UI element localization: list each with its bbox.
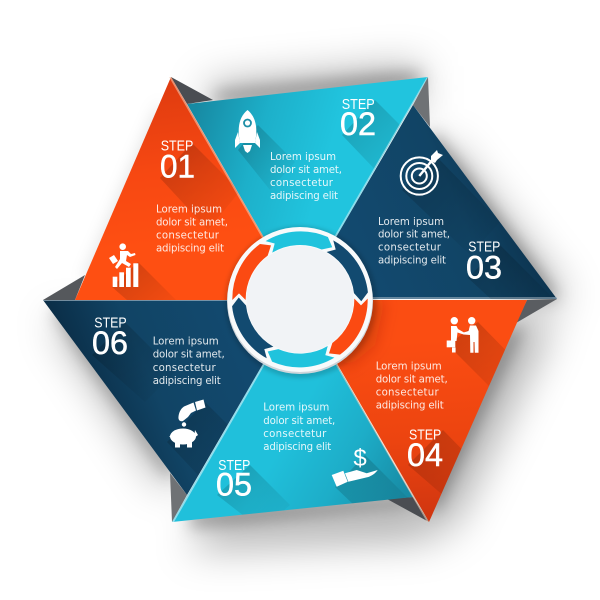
- heading: step 01: STEP: [161, 138, 193, 155]
- text block: step 05: dolor sit amet,: [263, 416, 335, 427]
- heading: step 04: STEP: [409, 427, 441, 444]
- text block: step 06: [153, 337, 225, 387]
- text block: step 06: consectetur: [153, 363, 216, 374]
- arrow: teal top: [266, 213, 333, 275]
- text block: step 02: [270, 152, 342, 202]
- text block: step 04: consectetur: [376, 387, 439, 398]
- icon: hand with dollar: $: [353, 445, 367, 472]
- dark folded corners: [43, 77, 557, 522]
- heading: step 03: STEP: [468, 239, 500, 256]
- text block: step 05: adipiscing elit: [263, 442, 331, 453]
- text block: step 02: adipiscing elit: [270, 191, 338, 202]
- text block: step 01: consectetur: [156, 230, 220, 242]
- icon: hand and piggy bank: [169, 400, 206, 448]
- icon: handshake: [447, 317, 478, 353]
- background drop shadows: [50, 65, 570, 550]
- heading: step 05: 05: [216, 467, 252, 503]
- heading: step 02: STEP: [342, 96, 375, 113]
- heading: step 06: 06: [92, 325, 128, 361]
- icon: runner on bar chart: [109, 243, 138, 287]
- text block: step 02: consectetur: [270, 178, 334, 189]
- icon: hand with dollar: [332, 445, 378, 487]
- text block: step 04: adipiscing elit: [376, 400, 444, 411]
- heading: step 03: 03: [466, 249, 502, 285]
- text block: step 06: Lorem ipsum: [153, 337, 219, 348]
- text block: step 04: Lorem ipsum: [376, 361, 442, 372]
- text block: step 03: [378, 217, 450, 266]
- arrow: navy lower left: [218, 297, 286, 358]
- text block: step 05: Lorem ipsum: [263, 403, 329, 414]
- text block: step 01: Lorem ipsum: [156, 204, 222, 216]
- panel: step 06: [43, 300, 263, 495]
- icon: rocket: [235, 110, 260, 153]
- arrow: navy upper right: [314, 240, 382, 302]
- panel: step 04: [336, 300, 527, 522]
- heading: step 02: 02: [340, 106, 376, 142]
- text block: step 01: dolor sit amet,: [156, 218, 228, 229]
- text block: step 02: Lorem ipsum: [270, 152, 336, 163]
- text block: step 03: consectetur: [378, 243, 442, 254]
- text block: step 01: [156, 204, 228, 254]
- heading: step 05: STEP: [218, 457, 250, 474]
- text block: step 03: dolor sit amet,: [378, 230, 450, 241]
- text block: step 04: [376, 361, 448, 411]
- centre circle with six arrows: [218, 213, 382, 386]
- text block: step 03: adipiscing elit: [378, 255, 446, 266]
- arrow: orange lower right: [329, 299, 368, 355]
- text block: step 06: dolor sit amet,: [153, 350, 225, 361]
- panel: step 03: [334, 77, 557, 299]
- text block: step 06: adipiscing elit: [153, 376, 221, 387]
- text block: step 03: Lorem ipsum: [378, 217, 444, 228]
- text block: step 05: [263, 403, 335, 453]
- text block: step 05: consectetur: [263, 429, 327, 440]
- panel: step 05: [172, 364, 413, 522]
- text block: step 02: dolor sit amet,: [270, 165, 342, 176]
- arrow: teal bottom: [267, 324, 334, 386]
- panel: step 01: [75, 77, 264, 300]
- text block: step 01: adipiscing elit: [156, 243, 224, 254]
- heading: step 06: STEP: [94, 314, 127, 331]
- heading: step 04: 04: [407, 437, 443, 473]
- text block: step 04: dolor sit amet,: [376, 374, 448, 385]
- icon: target with arrow: [401, 150, 443, 195]
- heading: step 01: 01: [160, 149, 195, 185]
- panel: step 02: [187, 77, 428, 237]
- arrow: orange upper left: [232, 244, 271, 300]
